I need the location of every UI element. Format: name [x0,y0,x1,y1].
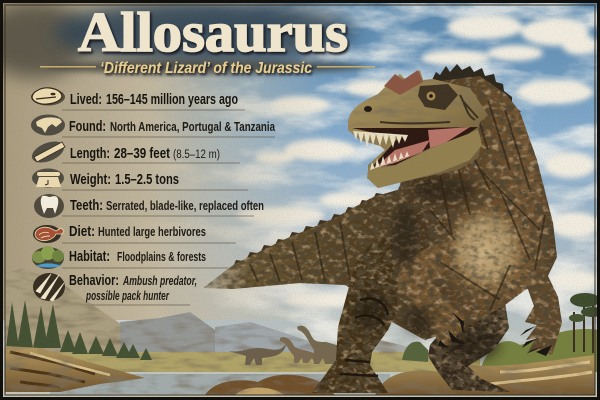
fact row: Found: North America, Portugal & Tanzania [110,119,276,134]
near arm [398,243,468,345]
upper teeth [353,131,408,148]
fact row: Habitat: Habitat: [69,248,110,265]
icon: trees and stream [32,246,64,269]
eye socket shadow [418,84,458,110]
fact row: Diet: Diet: [69,223,95,240]
icon: tooth [34,194,64,218]
claws [438,312,552,356]
dark title backdrop [0,0,365,78]
fact row: Lived: 156–145 million years ago [106,91,238,108]
fact row: Behavior [33,272,197,303]
left forest [6,300,152,360]
sauropod 1 [229,344,286,365]
icon: claw marks [33,273,65,301]
fact row: Behavior: Behavior: [69,272,119,289]
sauropod 2 [280,337,320,363]
foreground rocks [205,355,595,395]
river [50,374,390,394]
nostril [364,106,372,112]
stripes [250,90,545,310]
sauropod 3 [297,326,340,364]
Allosaurus illustration [203,64,562,393]
lower jaw [367,130,482,188]
fact row: Teeth: Serrated, blade-like, replaced often [106,198,264,213]
fact row: Habitat: Floodplains & forests [117,249,206,264]
icon: meat [33,225,64,243]
fact row: Lived: Lived: [70,91,102,108]
fact row: Behavior: Ambush predator, [122,273,197,288]
fact row: Weight: 1.5–2.5 tons [115,171,179,188]
fact row: Habitat [32,246,206,269]
lower teeth [370,151,409,170]
icon: ruler [29,137,67,167]
icon: skull fossil [31,88,65,106]
leg folds [340,299,388,376]
skull [348,70,488,188]
icon: map [31,114,65,136]
fact row: Lived [31,88,238,108]
near hind leg [312,238,397,393]
far hind leg [428,300,510,392]
fact row: Length: Length: [70,145,110,162]
subtitle: ‘Different Lizard’ of the Jurassic [100,60,312,77]
left foreground bank [5,346,145,392]
fact row: Teeth [34,194,264,218]
chest light scales [456,214,516,282]
title: Allosaurus [78,2,348,64]
body mass [203,76,562,393]
icon: scale [32,168,64,188]
sauropods in the distance [229,326,340,365]
brow horns [384,70,423,95]
torso and neck [372,76,557,340]
fact row: Found: Found: [69,118,106,135]
chest highlight [435,198,535,306]
fact row: Diet: Hunted large herbivores [98,224,206,239]
fact row: Length [29,137,220,167]
cheek folds [380,95,478,124]
fact row: Weight [32,168,179,188]
far arm [525,276,562,355]
right trees [402,293,600,372]
neck spines [432,64,521,112]
parchment panel wash [0,0,330,320]
fact row: Length: 28–39 feet [114,145,170,162]
plain [60,352,480,372]
fact row: Behavior: possible pack hunter [85,288,170,303]
fact row: Teeth: Teeth: [70,197,103,214]
distant mountains [5,268,180,356]
landscape [5,268,480,394]
fact row: Length: (8.5–12 m) [173,149,220,161]
fact row: Found [31,114,276,136]
tail spines [233,193,390,267]
fact row: Diet [33,223,206,243]
tail [203,183,470,330]
eye [426,92,436,100]
fact row: Weight: Weight: [70,171,111,188]
body shadows [354,178,501,361]
mouth interior [352,127,478,167]
